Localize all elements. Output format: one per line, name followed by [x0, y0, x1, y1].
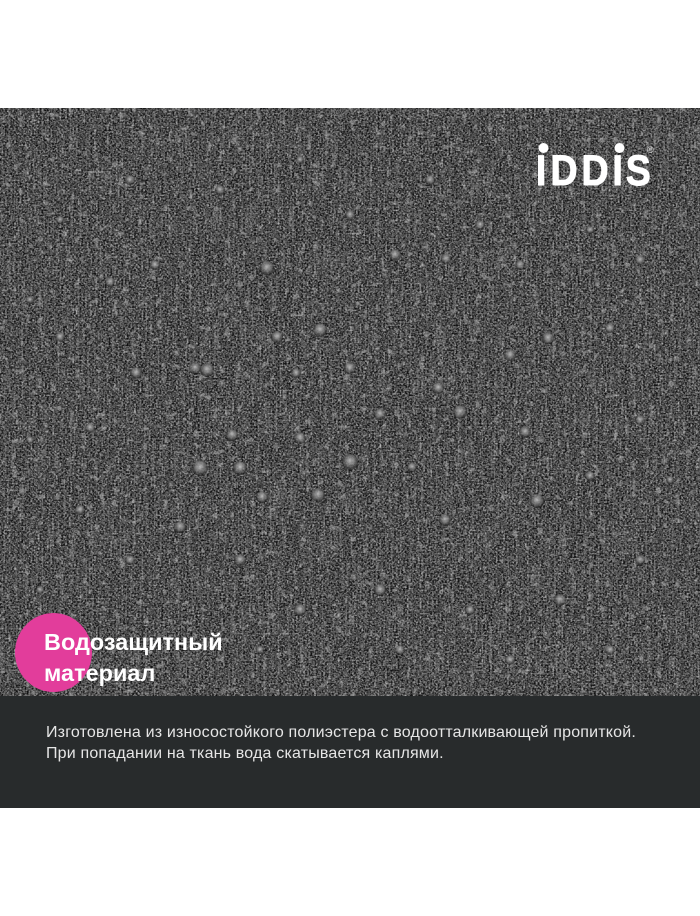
description text — [46, 724, 636, 762]
heading — [44, 629, 223, 686]
heading: Водозащитный — [44, 629, 223, 655]
logo: IDDIS: ® — [647, 145, 654, 155]
description text: При попадании на ткань вода скатывается каплями. — [46, 745, 444, 762]
description text: Изготовлена из износостойкого полиэстера с водоотталкивающей пропиткой. — [46, 724, 636, 741]
fabric base — [0, 108, 700, 696]
pink accent circle — [15, 613, 92, 692]
water droplets — [26, 156, 674, 665]
heading: материал — [44, 660, 155, 686]
panel: description band — [0, 696, 700, 808]
photo: wet dark fabric texture with water droplets — [0, 108, 700, 696]
